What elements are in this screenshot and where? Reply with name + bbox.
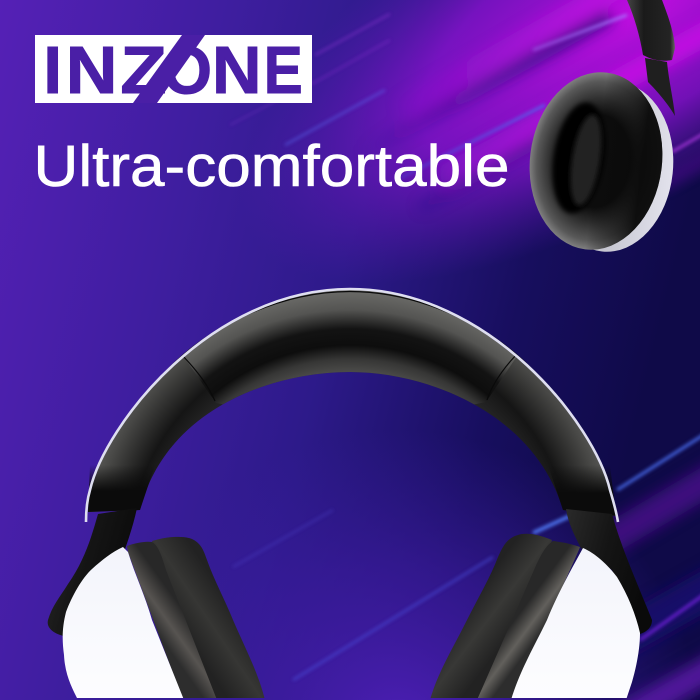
right grey ring: [477, 541, 580, 700]
small ear pad opening: [546, 99, 612, 217]
small headphone: ear cup side view, top right: [520, 0, 682, 258]
left white cup: [63, 547, 184, 700]
headband: [86, 289, 618, 522]
small ear pad: [520, 65, 672, 257]
headband white outer rim: [86, 289, 618, 522]
headband side padding: [88, 358, 616, 516]
logo wordmark: N: [66, 33, 118, 108]
small arm: [645, 58, 675, 116]
headband seam lines: [170, 292, 530, 401]
logo wordmark: I: [43, 33, 62, 108]
left arm: [48, 508, 137, 636]
right ear pad: [430, 534, 552, 700]
right white cup: [511, 548, 640, 700]
left grey ring: [127, 542, 217, 700]
left ear pad: [152, 537, 265, 700]
small headband: [627, 0, 675, 61]
logo wordmark: E: [264, 33, 303, 108]
right arm: [566, 509, 652, 634]
headband end shading: [88, 465, 616, 516]
heading: Ultra-comfortable: [34, 134, 510, 199]
small white shell: [540, 76, 682, 258]
logo white plate: [35, 35, 312, 103]
logo wordmark: O: [162, 34, 212, 108]
main headphones: [48, 289, 652, 700]
logo: INZONE: [35, 33, 312, 108]
headband leather centre pad: [184, 290, 516, 404]
logo wordmark: Z: [120, 33, 167, 108]
logo wordmark: N: [212, 33, 262, 108]
logo wordmark: [43, 33, 303, 108]
